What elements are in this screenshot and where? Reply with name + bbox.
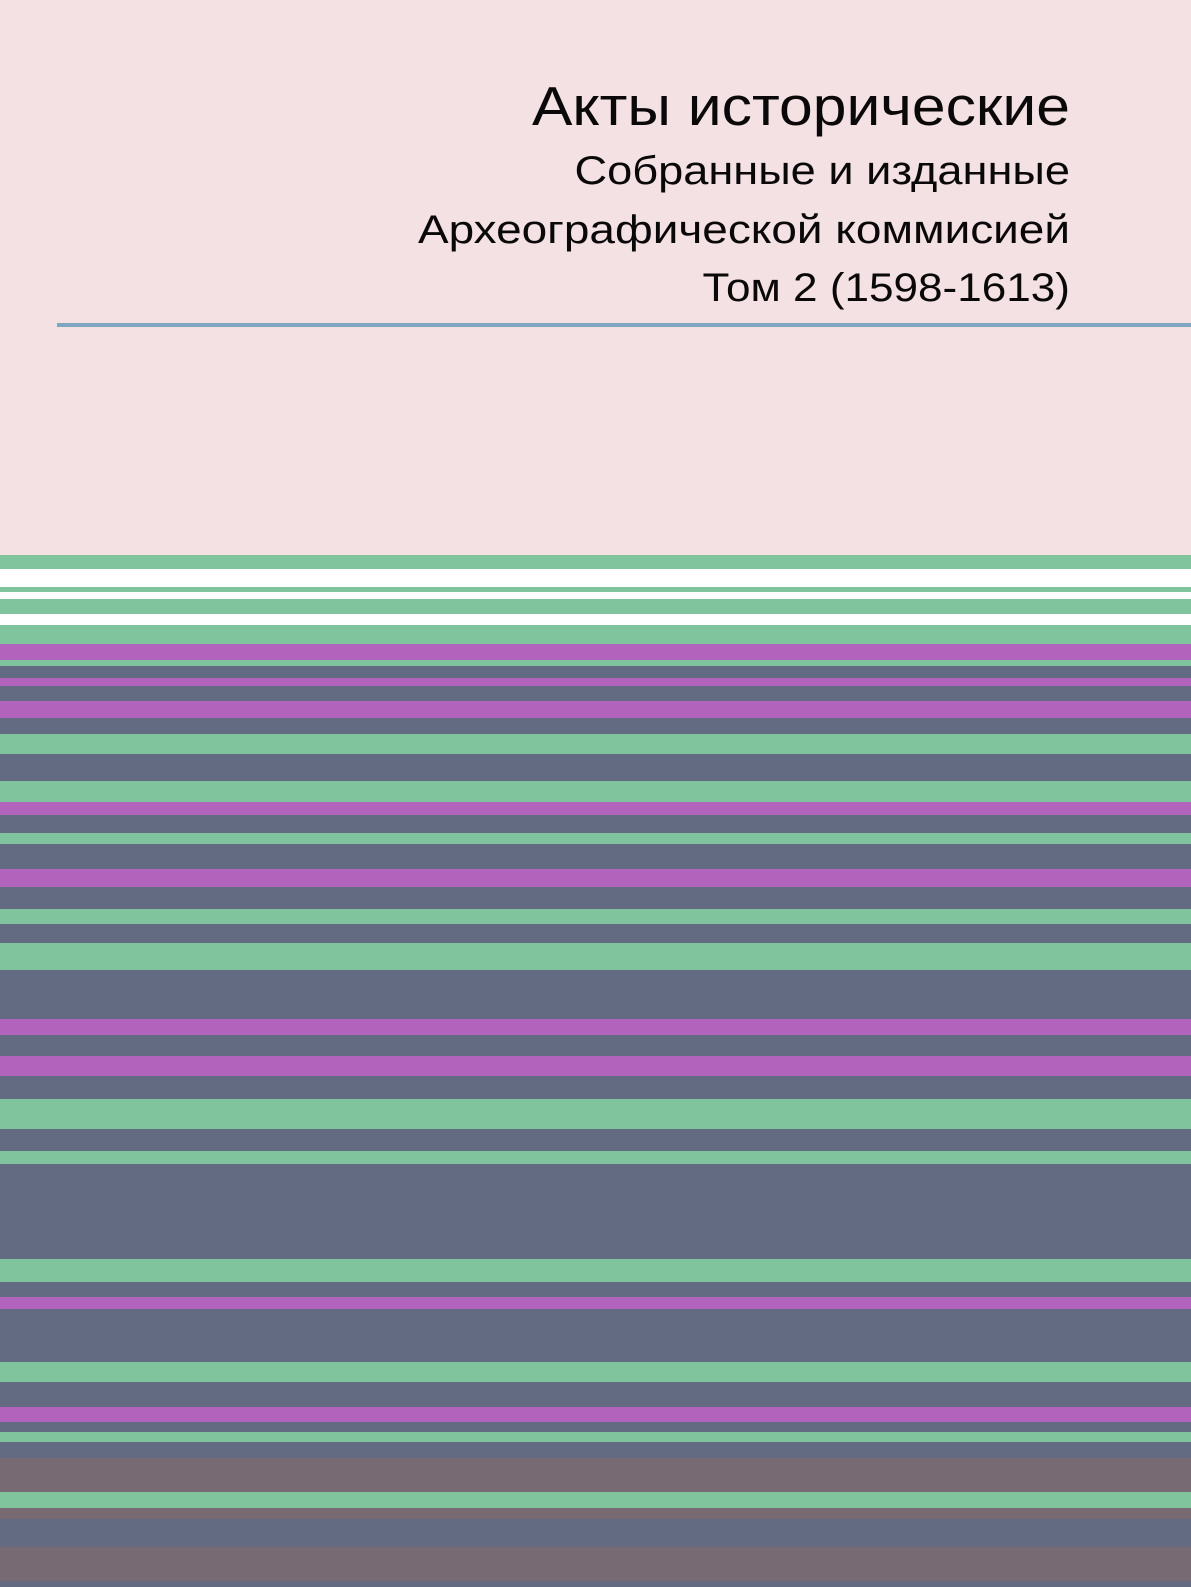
volume line: Том 2 (1598-1613) [702, 266, 1070, 310]
subtitle line 2: Археографической коммисией [418, 208, 1070, 252]
striped band panel [0, 555, 1191, 1587]
subtitle line 1: Собранные и изданные [574, 149, 1070, 193]
blue rule [57, 323, 1191, 327]
title: Акты исторические [532, 75, 1070, 137]
background panel: pink [0, 0, 1191, 555]
